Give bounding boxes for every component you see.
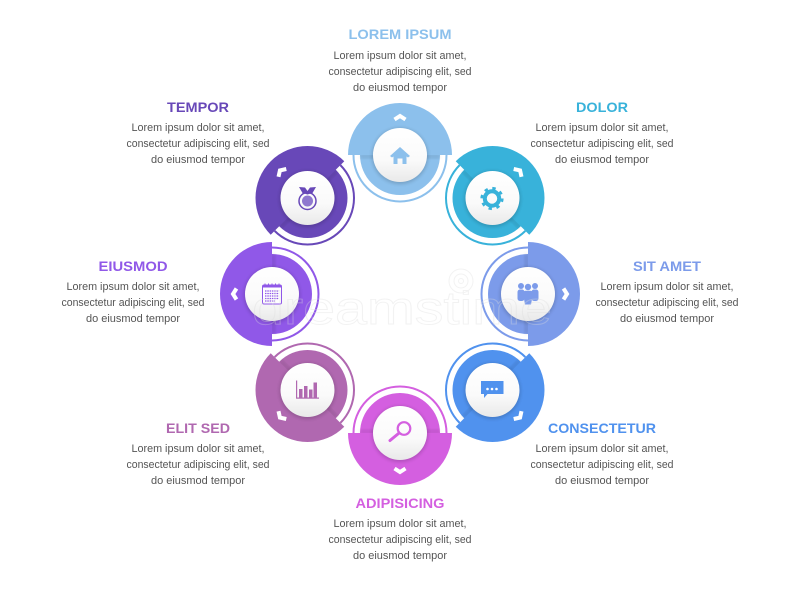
text: tempor: do eiusmod tempor: [151, 154, 245, 166]
node: elit sed: [234, 320, 377, 464]
text: elit sed: Lorem ipsum dolor sit amet,: [132, 443, 264, 455]
node: lorem ipsum: [348, 103, 452, 202]
node: sit amet: [482, 242, 580, 346]
text: elit sed: consectetur adipiscing elit, sed: [126, 459, 270, 471]
text: tempor: TEMPOR: [167, 99, 229, 115]
text: consectetur: do eiusmod tempor: [555, 475, 649, 487]
text: consectetur: consectetur adipiscing elit, sed: [530, 459, 674, 471]
text: consectetur: [530, 420, 674, 487]
text: dolor: DOLOR: [576, 99, 628, 115]
text: sit amet: [596, 258, 738, 325]
icon: calendar: [262, 284, 282, 304]
text: dolor: consectetur adipiscing elit, sed: [530, 138, 674, 150]
icon: bar chart: [296, 380, 319, 399]
text: consectetur: CONSECTETUR: [548, 420, 656, 436]
node: dolor: [423, 124, 566, 268]
text: adipisicing: do eiusmod tempor: [353, 550, 447, 562]
text: tempor: Lorem ipsum dolor sit amet,: [132, 122, 264, 134]
text: eiusmod: EIUSMOD: [98, 258, 168, 274]
text: eiusmod: do eiusmod tempor: [86, 313, 180, 325]
text: elit sed: ELIT SED: [166, 420, 230, 436]
text: tempor: [126, 99, 270, 166]
text: eiusmod: consectetur adipiscing elit, sed: [62, 297, 204, 309]
node: eiusmod: [220, 242, 318, 346]
text: adipisicing: consectetur adipiscing elit, sed: [328, 534, 472, 546]
text: sit amet: consectetur adipiscing elit, sed: [596, 297, 738, 309]
node: tempor: [234, 124, 377, 268]
text: lorem ipsum: consectetur adipiscing elit, sed: [328, 66, 472, 78]
text: sit amet: SIT AMET: [633, 258, 701, 274]
watermark: [252, 269, 552, 334]
icon: house: [390, 147, 410, 164]
icon: gear: [482, 188, 502, 209]
text: dolor: Lorem ipsum dolor sit amet,: [536, 122, 668, 134]
text: dolor: do eiusmod tempor: [555, 154, 649, 166]
watermark: dreamstime: [252, 282, 552, 334]
icon: medal: [299, 187, 316, 210]
text: elit sed: [126, 420, 270, 487]
text: dolor: [530, 99, 674, 166]
icon: magnifier: [390, 422, 410, 440]
text: eiusmod: Lorem ipsum dolor sit amet,: [66, 281, 200, 293]
text: consectetur: Lorem ipsum dolor sit amet,: [536, 443, 668, 455]
text: lorem ipsum: Lorem ipsum dolor sit amet,: [334, 50, 466, 62]
text: sit amet: do eiusmod tempor: [620, 313, 714, 325]
text: adipisicing: Lorem ipsum dolor sit amet,: [334, 518, 466, 530]
icon: people: [518, 283, 538, 304]
icon: speech bubble: [481, 381, 504, 398]
text: eiusmod: [62, 258, 204, 325]
text: lorem ipsum: LOREM IPSUM: [348, 26, 452, 42]
text: adipisicing: [328, 495, 472, 562]
text: lorem ipsum: [328, 26, 472, 94]
node: adipisicing: [348, 386, 452, 485]
text: lorem ipsum: do eiusmod tempor: [353, 82, 447, 94]
text: sit amet: Lorem ipsum dolor sit amet,: [600, 281, 734, 293]
text: adipisicing: ADIPISICING: [356, 495, 445, 511]
text: tempor: consectetur adipiscing elit, sed: [126, 138, 270, 150]
text: elit sed: do eiusmod tempor: [151, 475, 245, 487]
node: consectetur: [423, 320, 566, 464]
